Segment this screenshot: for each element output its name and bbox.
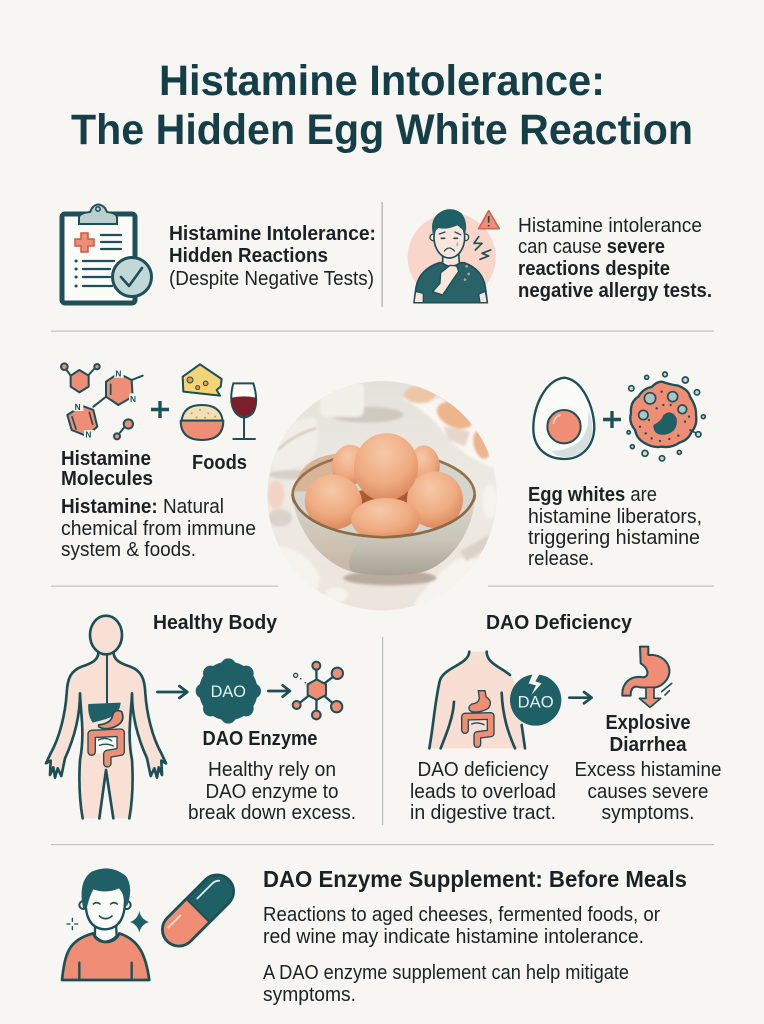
text block: mitigation: A DAO enzyme supplement can help mitigate [263, 962, 629, 984]
label: explosive diarrhea [606, 712, 690, 756]
arrow [569, 692, 592, 703]
arrow [157, 686, 187, 698]
text block: histamine definition: chemical from immune [61, 518, 256, 540]
icon: wine glass [231, 383, 256, 439]
text block: mitigation [263, 962, 629, 1006]
text block: excess histamine [574, 759, 722, 824]
text block: reactions: red wine may indicate histamine intolerance. [263, 926, 644, 948]
icon: cheese [183, 364, 222, 396]
label: explosive diarrhea: Diarrhea [610, 734, 687, 756]
icon: bowl of food [181, 405, 223, 440]
text block: DAO deficiency: DAO deficiency [418, 759, 548, 781]
text block: egg whites: Egg whites are [528, 484, 657, 506]
text block: DAO deficiency: leads to overload [410, 781, 556, 803]
photo: bowl of eggs [260, 378, 503, 615]
text block: egg whites: release. [528, 548, 594, 570]
label: DAO enzyme: DAO Enzyme [202, 728, 318, 750]
icon: clipboard with check [62, 204, 152, 303]
label: histamine molecules [61, 448, 153, 490]
label: histamine molecules: Histamine [61, 448, 151, 470]
icon: histamine molecules: N [85, 430, 91, 440]
text block: severe reactions: negative allergy tests. [518, 280, 712, 302]
text block: excess histamine: causes severe [588, 781, 708, 803]
text block: hidden reactions: Histamine Intolerance: [169, 223, 376, 245]
text block: healthy rely: Healthy rely on [208, 759, 336, 781]
text block: egg whites: histamine liberators, [528, 506, 702, 528]
text block: egg whites: triggering histamine [528, 527, 700, 549]
label: histamine molecules: Molecules [61, 468, 153, 490]
text block: severe reactions: reactions despite [518, 258, 670, 280]
icon: capsule [156, 868, 240, 953]
icon: stomach with down arrow [622, 647, 672, 707]
icon: histamine molecules [61, 363, 143, 440]
icon: histamine molecules: N [115, 369, 121, 379]
icon: broken-down molecule [293, 662, 343, 719]
text block: hidden reactions [169, 223, 376, 290]
text block: reactions: Reactions to aged cheeses, fermented foods, or [263, 904, 660, 926]
text block: histamine definition: Histamine: Natural [61, 496, 224, 518]
icon: plus [603, 411, 621, 428]
text block: hidden reactions: Hidden Reactions [169, 245, 328, 267]
icon: torso with digestive tract [429, 652, 525, 748]
text block: excess histamine: Excess histamine [574, 759, 722, 781]
text block: mitigation: symptoms. [263, 984, 356, 1006]
title [71, 57, 693, 154]
label: foods: Foods [192, 452, 247, 474]
icon: smiling person [62, 868, 149, 980]
text block: hidden reactions: (Despite Negative Tests) [169, 268, 374, 290]
label: explosive diarrhea: Explosive [606, 712, 690, 734]
icon: plus [151, 401, 169, 418]
icon: distressed person [408, 209, 499, 303]
icon: broken DAO circle: DAO [518, 692, 554, 711]
icon: human body with digestive tract [46, 616, 166, 818]
icon: DAO enzyme blob: DAO [211, 682, 246, 701]
icon: DAO enzyme blob [196, 658, 261, 724]
icon: histamine molecules: N [130, 394, 136, 404]
text block: healthy rely: DAO enzyme to [206, 781, 338, 803]
icon: broken DAO circle [510, 673, 561, 726]
text block: DAO deficiency: in digestive tract. [410, 802, 556, 824]
text block: healthy rely: break down excess. [188, 802, 356, 824]
icon: egg half [533, 378, 594, 459]
text block: healthy rely [188, 759, 356, 824]
heading: supplement: DAO Enzyme Supplement: Before Meals [263, 866, 687, 892]
text block: DAO deficiency [410, 759, 556, 824]
text block: histamine definition: system & foods. [61, 539, 196, 561]
text block: severe reactions: can cause severe [518, 236, 665, 258]
icon: mast cell [627, 372, 705, 461]
heading: healthy body: Healthy Body [153, 612, 278, 634]
heading: DAO deficiency: DAO Deficiency [486, 612, 633, 634]
text block: histamine definition [61, 496, 256, 561]
text block: egg whites [528, 484, 702, 570]
text block: severe reactions: Histamine intolerance [518, 215, 702, 237]
title: The Hidden Egg White Reaction [71, 106, 693, 154]
text block: reactions [263, 904, 660, 948]
text block: severe reactions [518, 215, 712, 302]
arrow [268, 685, 290, 697]
title: Histamine Intolerance: [159, 57, 605, 105]
text block: excess histamine: symptoms. [602, 802, 694, 824]
icon: histamine molecules: N [75, 402, 81, 412]
